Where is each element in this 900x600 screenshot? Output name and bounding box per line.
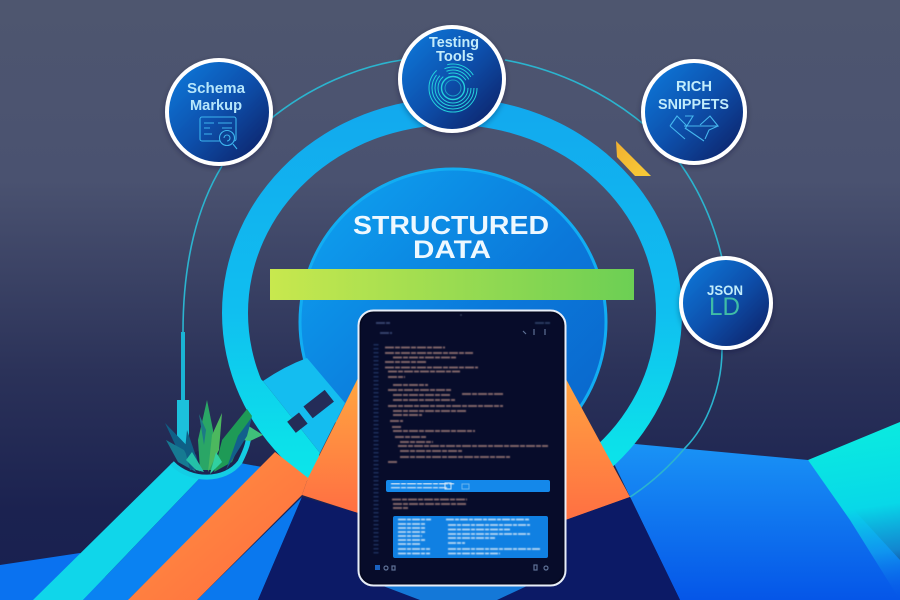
orange right facet (560, 368, 630, 522)
navy base (258, 497, 680, 600)
orange diagonal band (128, 452, 308, 600)
badge: rich snippets: RICH (676, 78, 712, 95)
badge: json ld (681, 258, 771, 348)
heading: STRUCTURED (353, 210, 549, 240)
bottom left blue facet (0, 553, 130, 600)
tablet (358, 310, 566, 586)
badge: testing tools: Testing (429, 34, 479, 51)
green bar (270, 269, 634, 300)
badge: testing tools (400, 27, 504, 131)
yellow accent (616, 141, 651, 176)
icon: snippet outlines (670, 116, 718, 141)
line number gutter (374, 344, 378, 554)
heading (353, 210, 549, 264)
thin orbit line (183, 60, 722, 497)
magnifier handle (250, 358, 345, 478)
lower blue diagonal band (197, 497, 302, 600)
camera (460, 314, 462, 316)
badge: rich snippets (643, 61, 745, 163)
badge: json ld: LD (709, 293, 740, 321)
icon: concentric fingerprint (429, 64, 477, 112)
code lines (376, 323, 550, 554)
plant in pot (165, 400, 263, 477)
icon: schema card with magnifier (200, 117, 237, 149)
main ring (222, 98, 682, 528)
blue wedge below tablet (383, 586, 527, 600)
toolbar icons (375, 329, 548, 570)
leaves (243, 425, 263, 441)
blue diagonal band (83, 463, 262, 600)
plant stem (177, 332, 189, 450)
handle slots (303, 390, 334, 418)
badge: schema markup (167, 60, 271, 164)
bottom right blue facet (603, 441, 900, 600)
orange left facet (302, 378, 358, 513)
code result box (393, 516, 548, 558)
badge: testing tools: Tools (436, 48, 474, 65)
badge: schema markup: Markup (190, 97, 242, 114)
center circle (300, 169, 606, 475)
badge: schema markup: Schema (187, 80, 246, 97)
bottom right cyan facet (808, 422, 900, 600)
badge: rich snippets: SNIPPETS (658, 96, 729, 113)
pot rim (172, 428, 249, 477)
badge: json ld: JSON (707, 282, 743, 298)
code highlight bar (386, 480, 550, 492)
heading: DATA (413, 236, 491, 264)
cyan diagonal band (33, 463, 200, 600)
